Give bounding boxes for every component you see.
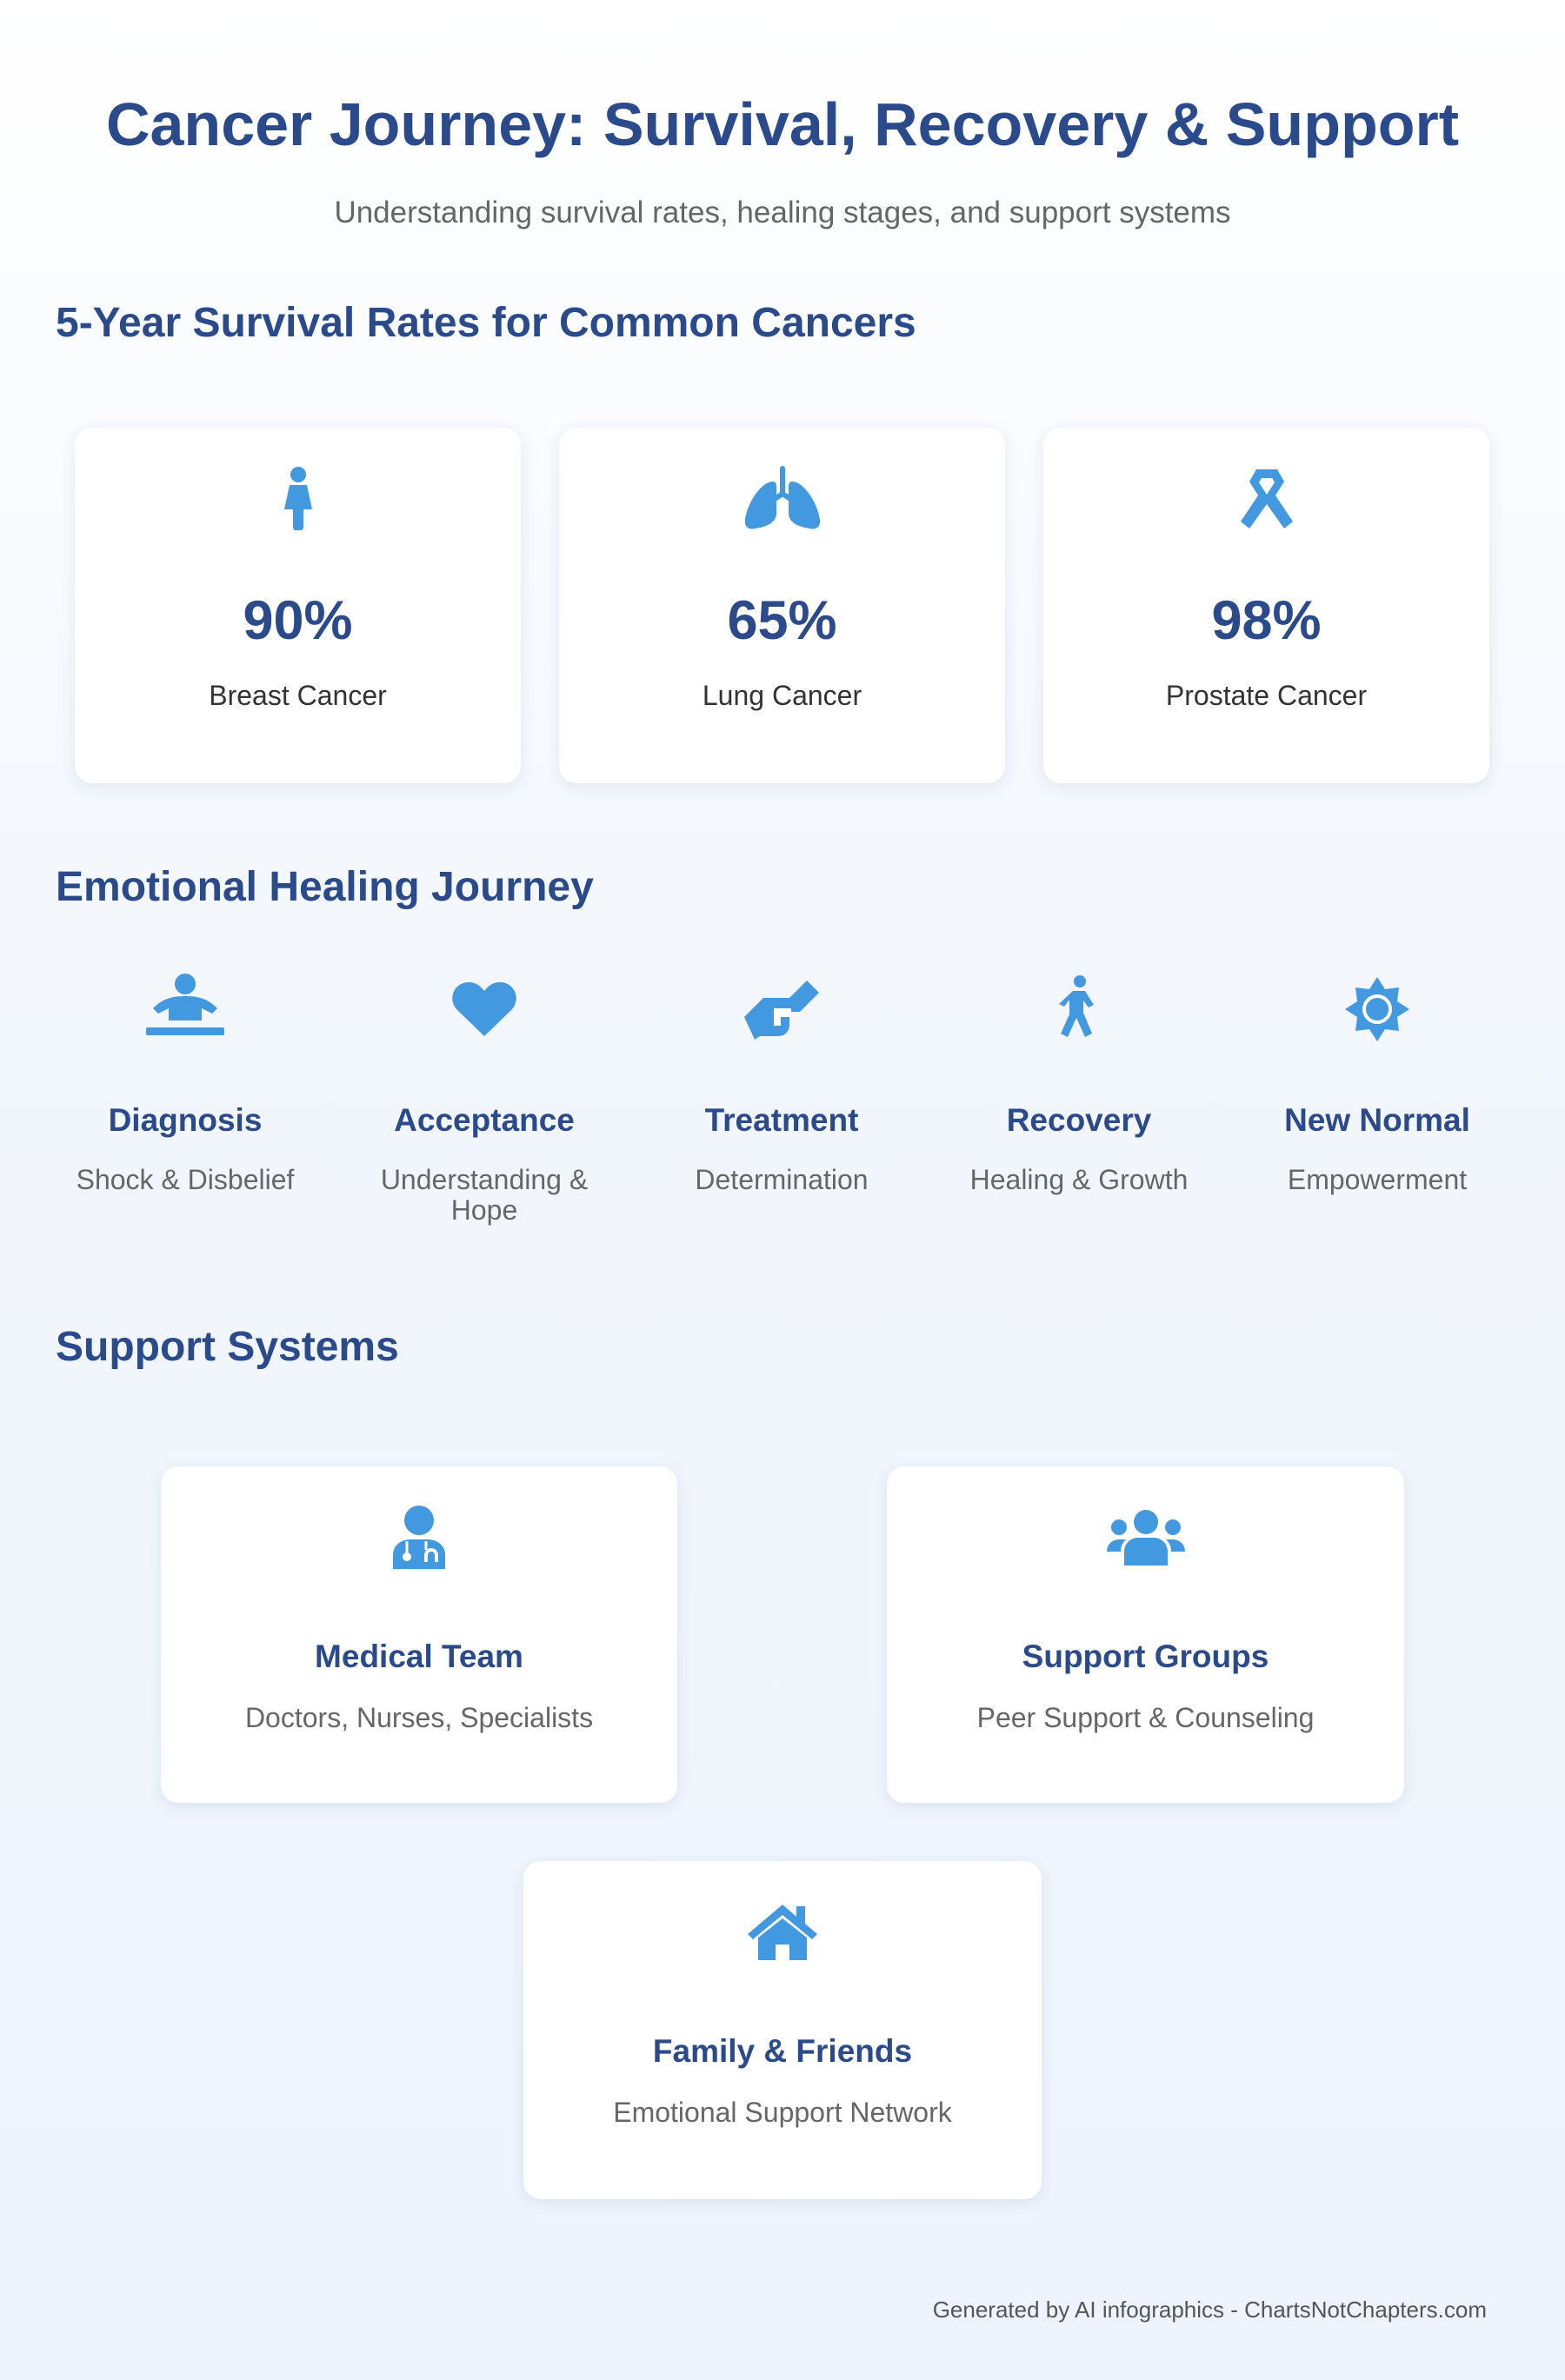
title: Acceptance [394, 1102, 575, 1138]
description [381, 1164, 588, 1226]
description: Doctors, Nurses, Specialists [245, 1702, 593, 1733]
label: Breast Cancer [209, 680, 387, 711]
heading: emotional healing: Emotional Healing Journey [56, 864, 594, 910]
icon: sun [1345, 977, 1409, 1041]
title: Recovery [1007, 1102, 1151, 1138]
description: Shock & Disbelief [77, 1164, 294, 1195]
title: Family & Friends [653, 2033, 912, 2069]
description: Peer Support & Counseling [977, 1702, 1314, 1733]
subtitle: Understanding survival rates, healing stages, and support systems [334, 196, 1231, 229]
heading: support systems: Support Systems [56, 1324, 399, 1370]
panel: lung cancer card [559, 428, 1005, 783]
title: New Normal [1284, 1102, 1470, 1138]
description: Understanding & [381, 1164, 588, 1195]
step: treatment [695, 981, 869, 1195]
description: Hope [451, 1194, 517, 1226]
percent: 90% [243, 590, 353, 651]
description: Emotional Support Network [613, 2097, 952, 2128]
icon: house [748, 1905, 817, 1960]
icon: patient [146, 974, 224, 1035]
label: Prostate Cancer [1166, 680, 1367, 711]
title: Medical Team [315, 1639, 523, 1674]
icon: ribbon [1241, 469, 1293, 529]
panel: medical team [161, 1466, 677, 1803]
icon: group [1107, 1510, 1185, 1566]
icon: doctor [393, 1506, 445, 1569]
icon: lungs [744, 466, 821, 529]
description: Determination [695, 1164, 869, 1195]
panel: prostate cancer card [1043, 428, 1489, 783]
title: Treatment [705, 1102, 858, 1138]
icon: heart [452, 982, 516, 1036]
percent: 65% [727, 590, 837, 651]
icon: walking [1059, 975, 1094, 1037]
step: recovery [970, 975, 1188, 1195]
footer: Generated by AI infographics - ChartsNotChapters.com [933, 2297, 1487, 2323]
panel: support groups [887, 1466, 1404, 1803]
percent: 98% [1211, 590, 1322, 651]
heading: survival rates: 5-Year Survival Rates for Common Cancers [56, 300, 916, 346]
description: Empowerment [1288, 1164, 1467, 1195]
step: acceptance [381, 982, 588, 1226]
description: Healing & Growth [970, 1164, 1188, 1195]
step: new normal [1284, 977, 1470, 1195]
step: diagnosis [77, 974, 294, 1195]
label: Lung Cancer [703, 680, 862, 711]
title: Cancer Journey: Survival, Recovery & Support [106, 90, 1459, 158]
icon: hands [744, 981, 819, 1040]
title: Support Groups [1022, 1639, 1269, 1674]
title: Diagnosis [109, 1102, 262, 1138]
panel: breast cancer card [75, 428, 521, 783]
panel: family and friends [523, 1861, 1042, 2199]
icon: female [284, 467, 312, 530]
